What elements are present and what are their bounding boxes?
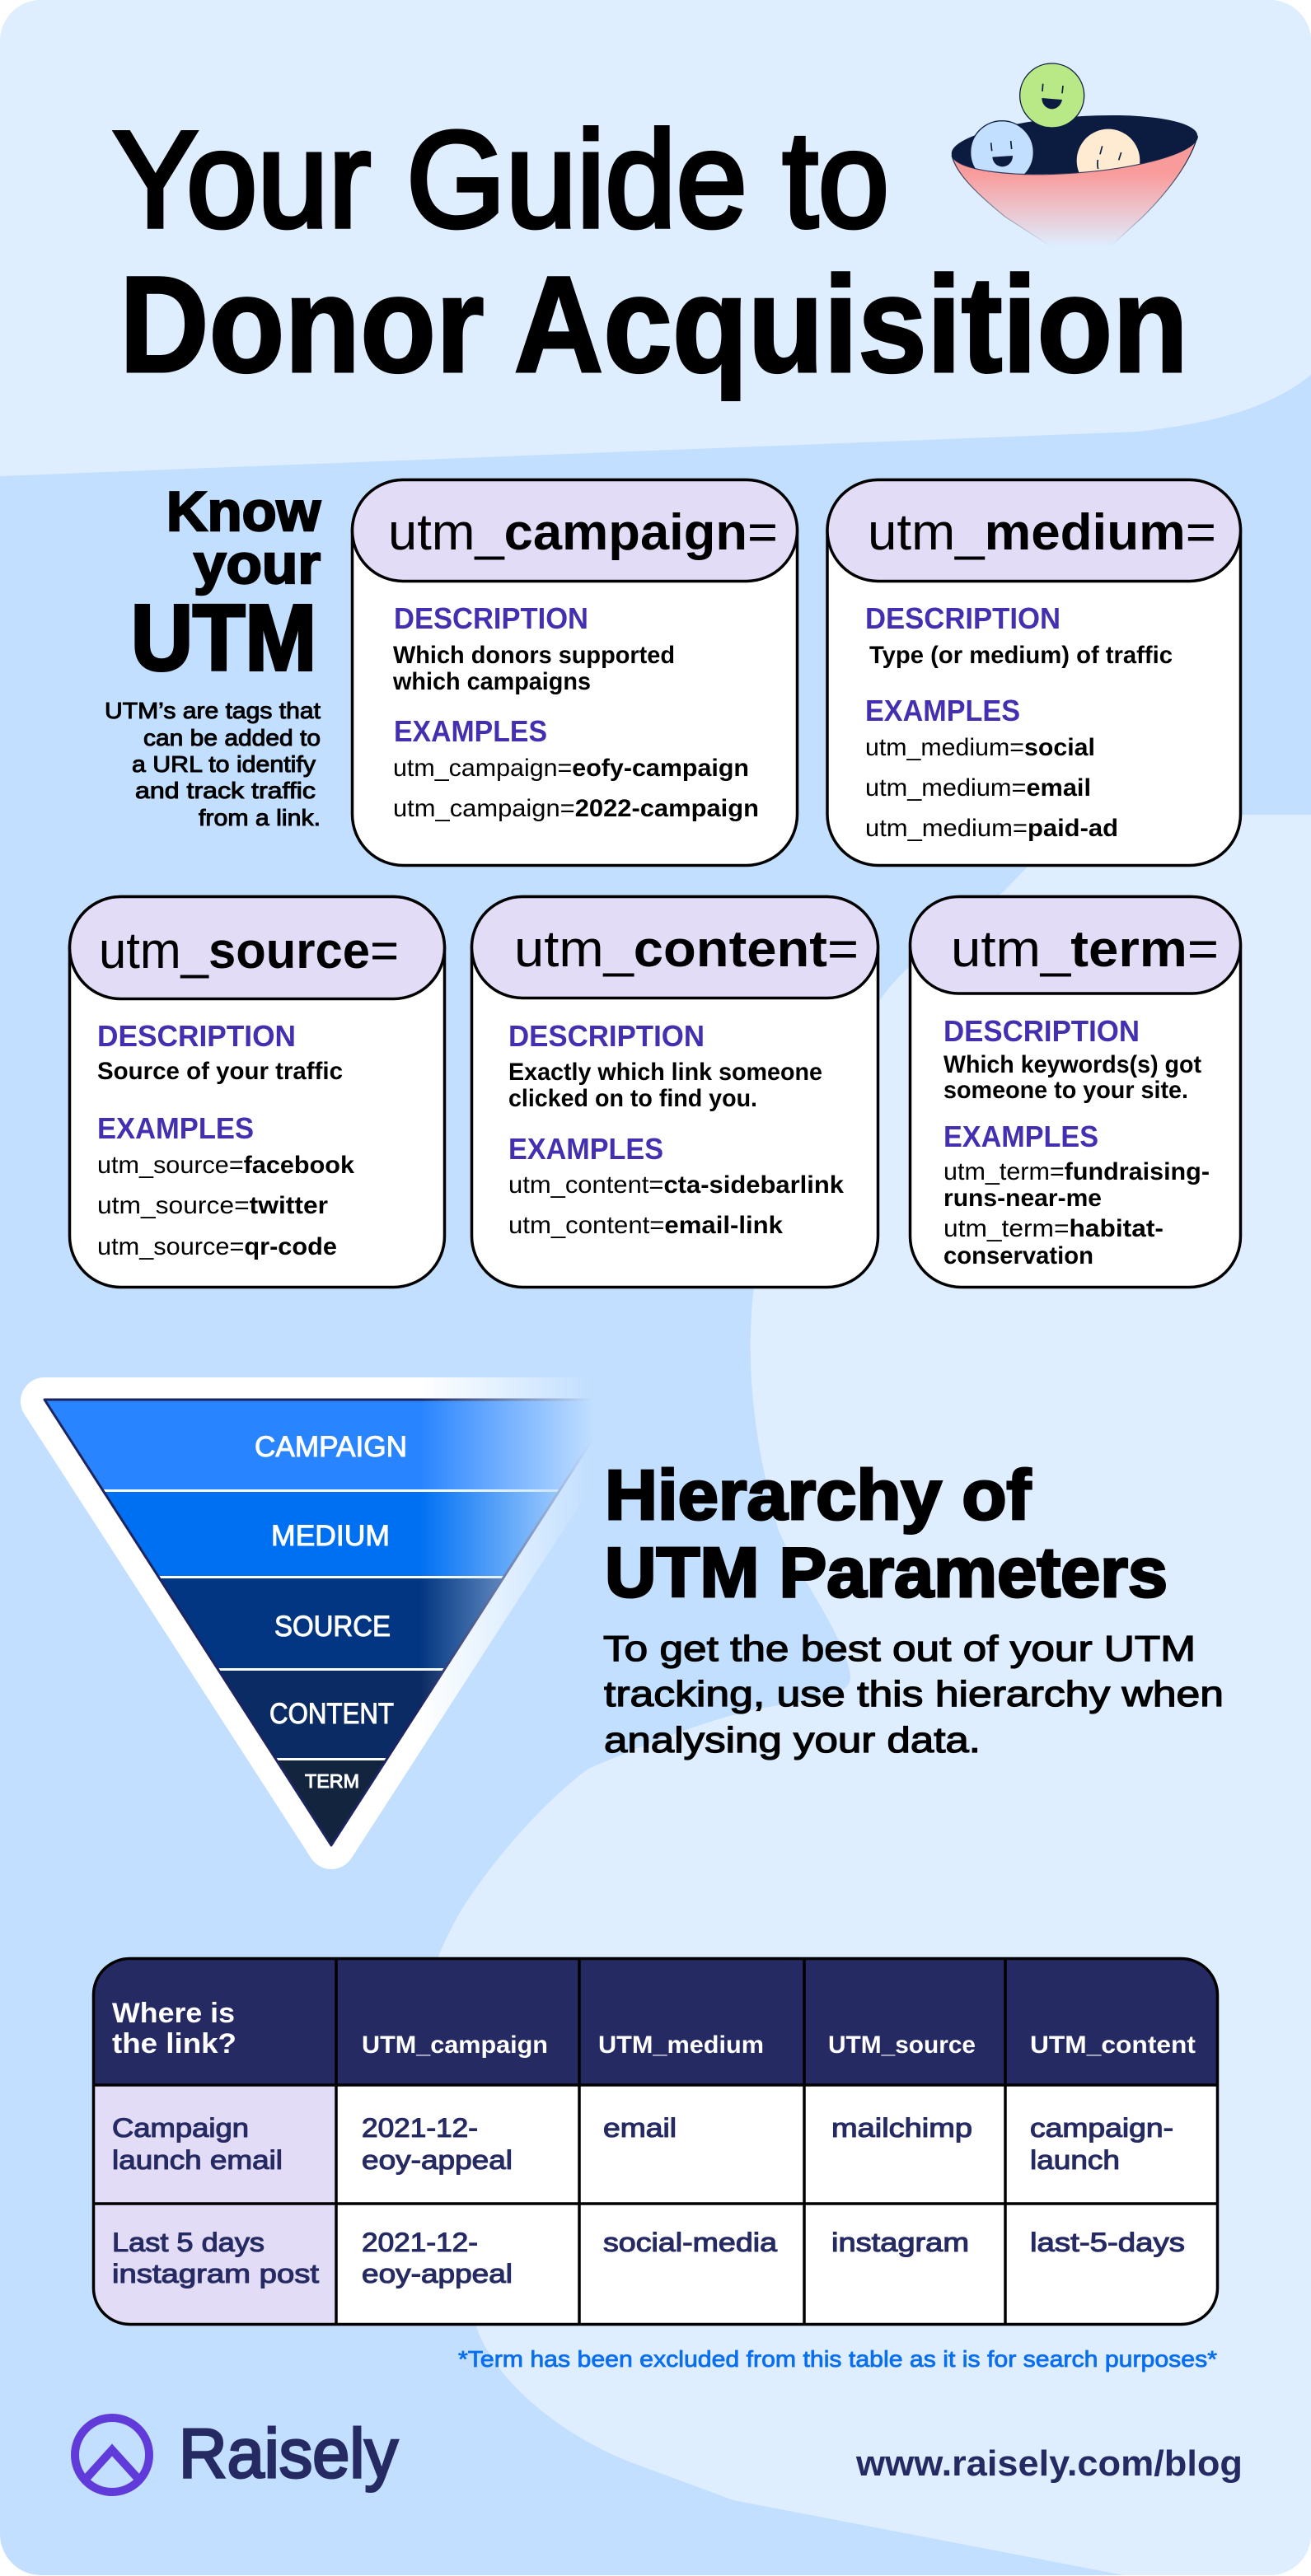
panel: utm_term: runs-near-me <box>943 1185 1102 1212</box>
icon: funnel with smiling faces <box>949 63 1200 247</box>
panel: utm_term: Which keywords(s) got <box>943 1051 1201 1078</box>
panel: utm_source <box>69 896 445 1287</box>
panel: utm_term: DESCRIPTION <box>943 1014 1140 1048</box>
panel: utm_source: utm_source=facebook <box>97 1152 354 1179</box>
table: example UTM values: mailchimp <box>831 2113 972 2143</box>
table: example UTM values: instagram <box>831 2228 969 2257</box>
panel: utm_content: utm_content=cta-sidebarlink <box>508 1171 844 1199</box>
table: example UTM values: social-media <box>603 2228 777 2257</box>
footnote: *Term has been excluded from this table as it is for search purposes* <box>458 2346 1217 2372</box>
title <box>113 104 1188 401</box>
panel: utm_content: Exactly which link someone <box>508 1059 822 1086</box>
text: UTM explanation <box>105 698 321 830</box>
chart: UTM hierarchy funnel: TERM <box>305 1770 359 1792</box>
panel: utm_term: someone to your site. <box>943 1077 1188 1104</box>
chart: UTM hierarchy funnel: SOURCE <box>274 1611 391 1643</box>
table: example UTM values: the link? <box>112 2028 236 2059</box>
chart: UTM hierarchy funnel: CONTENT <box>269 1698 394 1730</box>
text: UTM explanation: a URL to identify <box>132 751 316 777</box>
chart: UTM hierarchy funnel: MEDIUM <box>271 1520 390 1552</box>
chart: UTM hierarchy funnel <box>0 1400 659 1846</box>
table: example UTM values: Where is <box>112 1998 235 2029</box>
panel: utm_term: conservation <box>943 1242 1093 1269</box>
text: UTM explanation: can be added to <box>143 725 321 750</box>
table: example UTM values: eoy-appeal <box>362 2259 513 2288</box>
panel: utm_medium: DESCRIPTION <box>865 601 1061 635</box>
logo: Raisely: Raisely <box>179 2415 398 2492</box>
title: Donor Acquisition <box>119 249 1188 401</box>
table: example UTM values: campaign- <box>1030 2113 1173 2143</box>
panel: utm_medium: utm_medium=email <box>865 774 1091 802</box>
panel: utm_medium: utm_medium= <box>868 504 1216 561</box>
table: example UTM values: email <box>603 2113 677 2143</box>
table: example UTM values: Last 5 days <box>112 2228 265 2257</box>
text: UTM explanation: UTM’s are tags that <box>105 698 321 723</box>
panel: utm_campaign: EXAMPLES <box>394 714 547 748</box>
table: example UTM values: UTM_content <box>1030 2031 1196 2059</box>
text: hierarchy explanation: tracking, use this hierarchy when <box>604 1674 1224 1714</box>
text: hierarchy explanation <box>603 1629 1224 1760</box>
panel: utm_campaign: utm_campaign= <box>388 504 778 561</box>
panel: utm_source: EXAMPLES <box>97 1111 254 1145</box>
panel: utm_content: utm_content= <box>514 921 859 978</box>
heading: know your UTM: your <box>194 533 321 596</box>
heading: know your UTM: Know <box>166 480 321 543</box>
table: example UTM values: 2021-12- <box>362 2113 478 2143</box>
table: example UTM values: launch email <box>112 2145 283 2175</box>
panel: utm_campaign: utm_campaign=2022-campaign <box>393 795 759 822</box>
table: example UTM values: UTM_medium <box>598 2031 764 2059</box>
panel: utm_medium: utm_medium=paid-ad <box>865 815 1118 842</box>
panel: utm_source: utm_source= <box>99 923 399 979</box>
panel: utm_content: DESCRIPTION <box>508 1019 705 1053</box>
panel: utm_content <box>471 896 878 1287</box>
panel: utm_term: utm_term= <box>951 921 1219 978</box>
panel: utm_content: clicked on to find you. <box>508 1085 757 1112</box>
panel: utm_medium: Type (or medium) of traffic <box>869 642 1173 669</box>
table: example UTM values <box>92 1957 1219 2326</box>
title: Your Guide to <box>113 104 889 256</box>
table: example UTM values: eoy-appeal <box>362 2145 513 2175</box>
panel: utm_source: Source of your traffic <box>97 1058 343 1085</box>
chart: UTM hierarchy funnel: CAMPAIGN <box>255 1431 407 1463</box>
panel: utm_campaign: which campaigns <box>392 668 591 695</box>
table: example UTM values: Campaign <box>112 2113 249 2143</box>
panel: utm_campaign: utm_campaign=eofy-campaign <box>393 755 749 782</box>
website URL: www.raisely.com/blog <box>855 2443 1243 2484</box>
heading: hierarchy of UTM parameters: UTM Parameters <box>605 1534 1168 1612</box>
text: UTM explanation: and track traffic <box>135 778 316 803</box>
panel: utm_campaign: DESCRIPTION <box>394 601 588 635</box>
heading: know your UTM <box>131 480 321 690</box>
table: example UTM values: UTM_campaign <box>362 2031 548 2059</box>
panel: utm_medium: utm_medium=social <box>865 734 1095 761</box>
text: hierarchy explanation: To get the best out of your UTM <box>603 1629 1196 1669</box>
panel: utm_medium <box>827 479 1241 865</box>
table: example UTM values: UTM_source <box>828 2031 976 2059</box>
panel: utm_term <box>910 896 1241 1287</box>
panel: utm_content: utm_content=email-link <box>508 1212 783 1239</box>
logo: Raisely <box>75 2415 398 2492</box>
panel: utm_medium: EXAMPLES <box>865 694 1020 727</box>
panel: utm_term: utm_term= habitat- <box>943 1215 1164 1242</box>
panel: utm_source: utm_source= twitter <box>97 1192 328 1219</box>
table: example UTM values: last-5-days <box>1030 2228 1185 2257</box>
heading: hierarchy of UTM parameters <box>605 1456 1168 1612</box>
panel: utm_source: DESCRIPTION <box>97 1019 296 1053</box>
heading: hierarchy of UTM parameters: Hierarchy of <box>605 1456 1032 1535</box>
panel: utm_term: EXAMPLES <box>943 1120 1098 1153</box>
table: example UTM values: launch <box>1030 2145 1120 2175</box>
heading: know your UTM: UTM <box>131 586 316 690</box>
panel: utm_campaign <box>353 479 798 865</box>
panel: utm_source: utm_source=qr-code <box>97 1233 337 1260</box>
table: example UTM values: 2021-12- <box>362 2228 478 2257</box>
table: example UTM values: instagram post <box>112 2259 319 2288</box>
panel: utm_term: utm_term=fundraising- <box>943 1158 1210 1185</box>
text: UTM explanation: from a link. <box>199 805 321 830</box>
text: hierarchy explanation: analysing your data. <box>604 1720 981 1760</box>
panel: utm_campaign: Which donors supported <box>393 642 675 669</box>
panel: utm_content: EXAMPLES <box>508 1132 663 1166</box>
